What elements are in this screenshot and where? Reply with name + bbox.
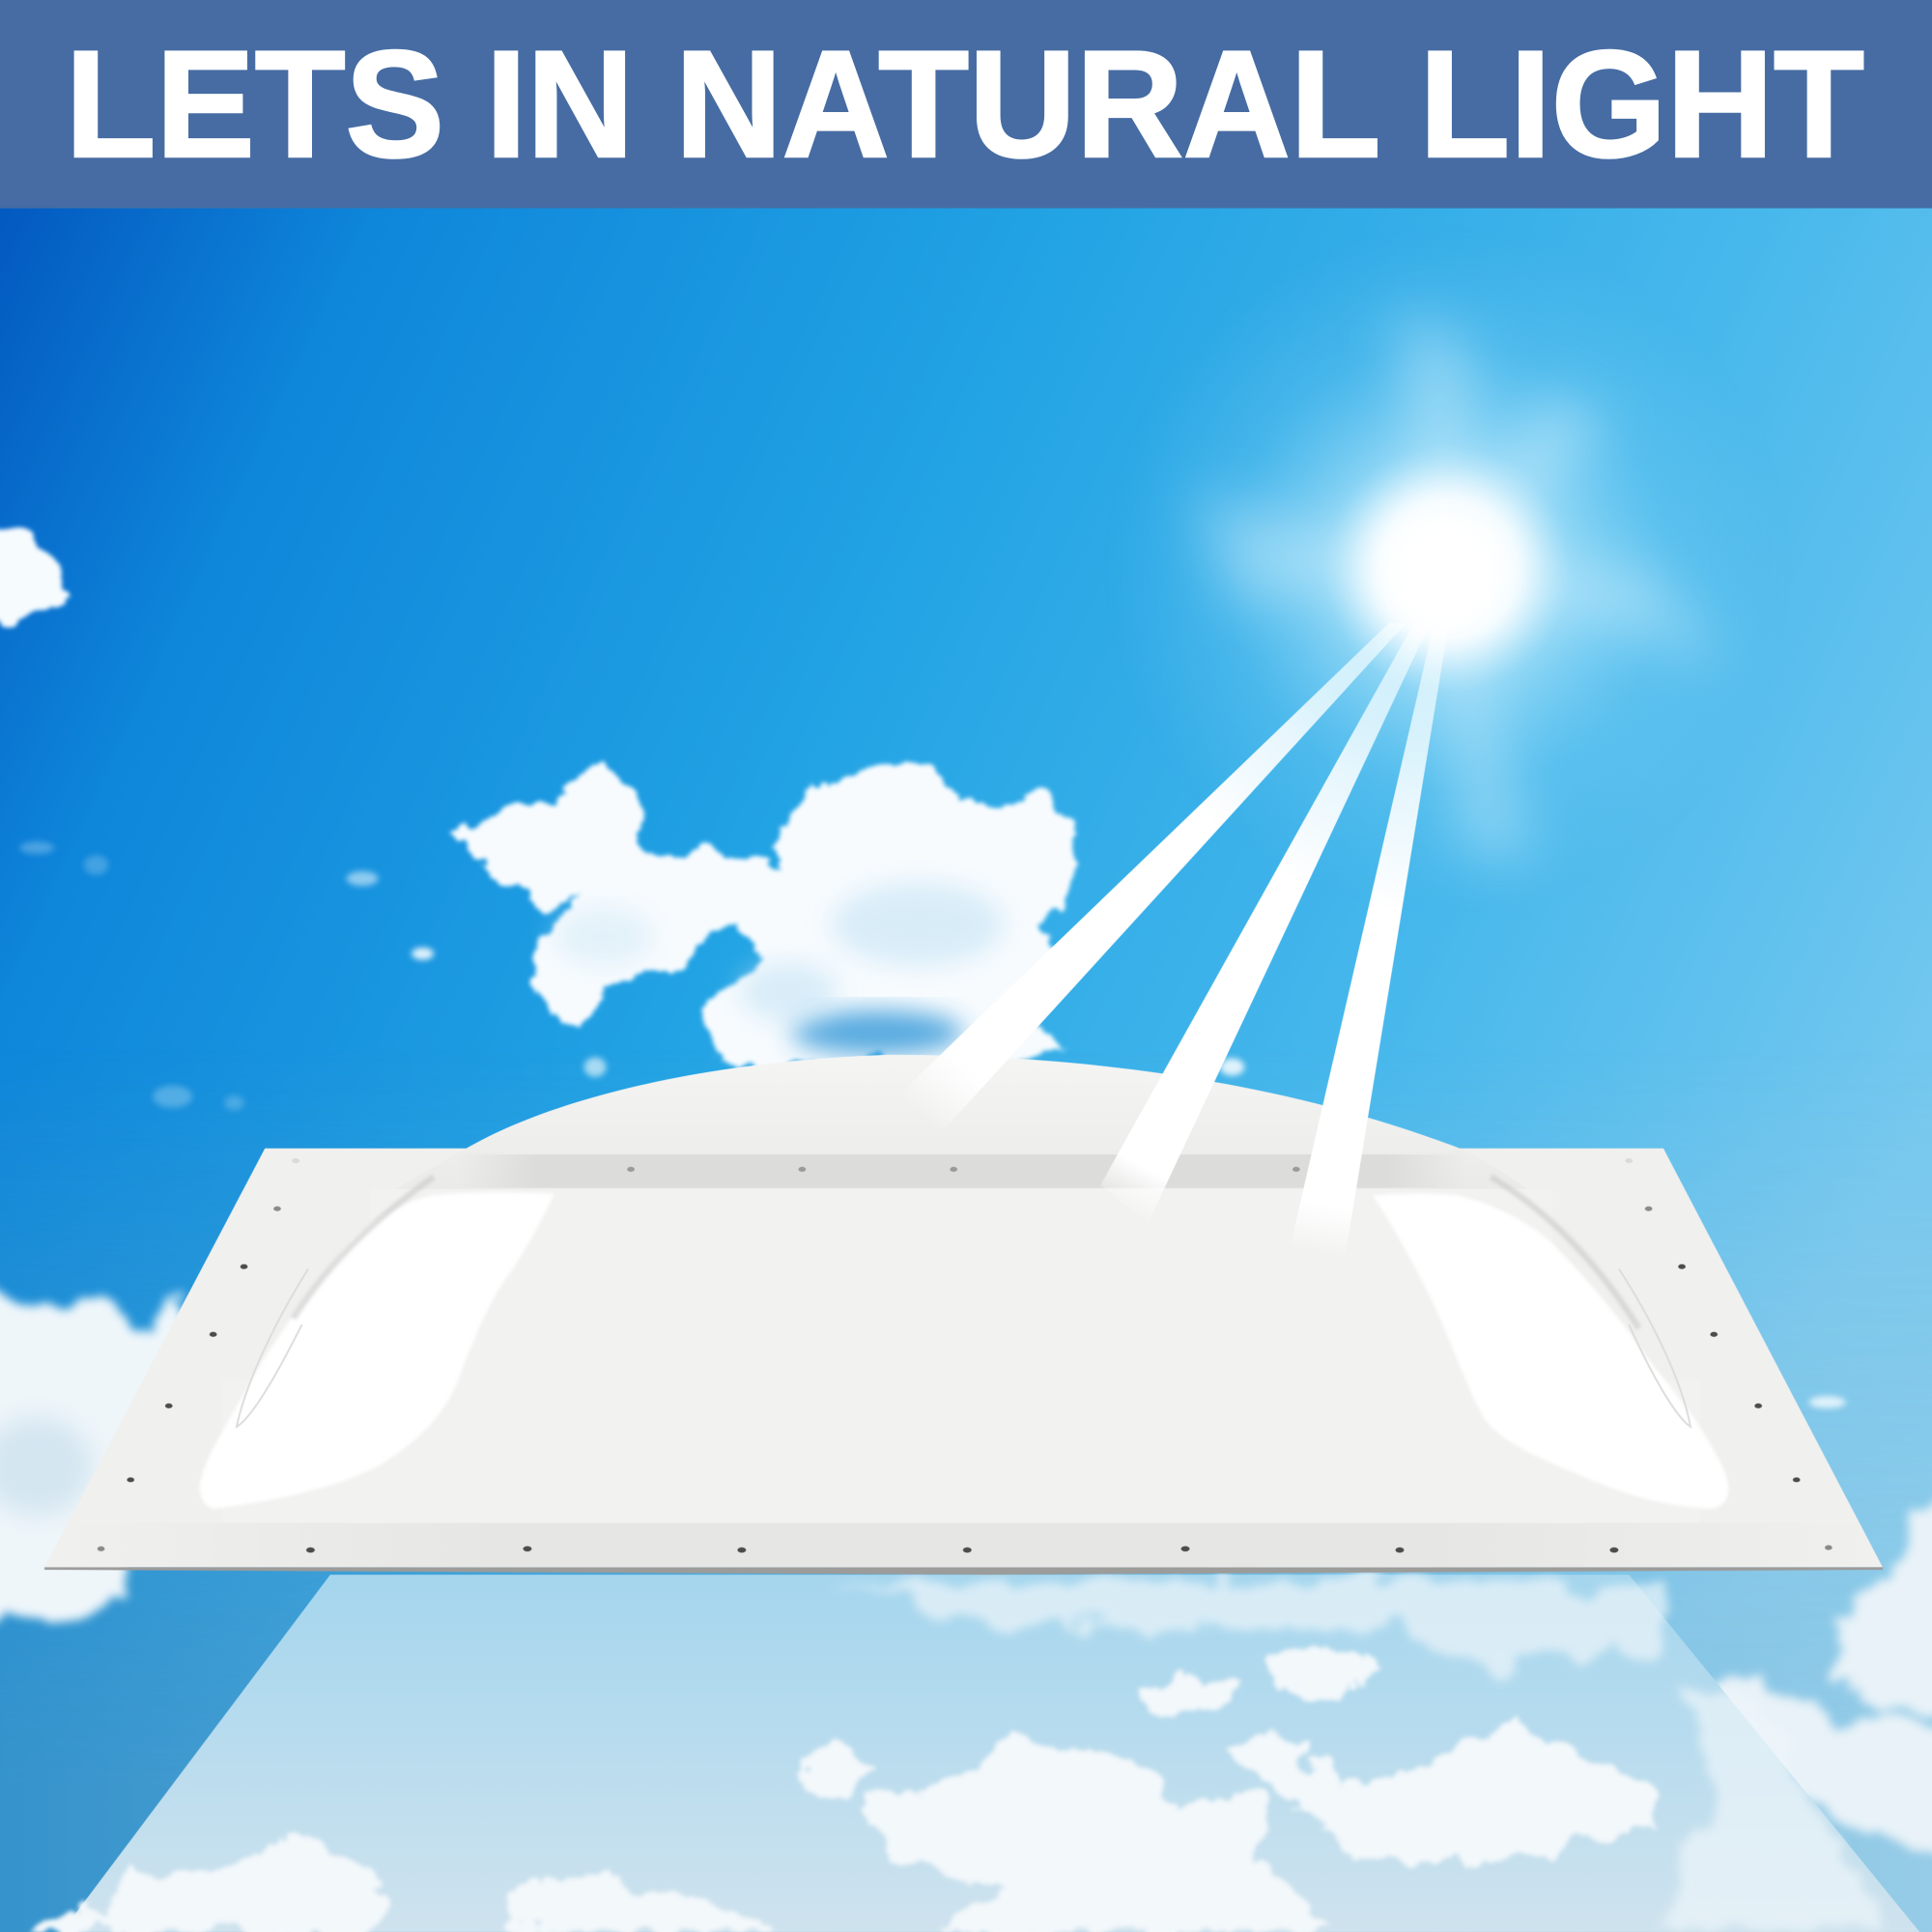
screws: [98, 1158, 1833, 1552]
translucent light beam under skylight: [62, 1575, 1919, 1932]
flange front lip: [74, 1523, 1861, 1567]
sun: [1103, 224, 1793, 914]
sun ray 3: [1290, 622, 1449, 1254]
sun ray 2: [1100, 622, 1430, 1222]
cloud: top-left edge: [0, 524, 74, 622]
flange: [44, 1149, 1883, 1575]
right dome edge shading: [1491, 1177, 1690, 1427]
left dome edge shading: [237, 1177, 434, 1427]
dome top: [397, 1055, 1528, 1189]
dome front face: [370, 1189, 1552, 1523]
sun ray 1: [899, 622, 1405, 1131]
dome lower face: [222, 1380, 1700, 1523]
right highlight: [1373, 1193, 1729, 1509]
cloud: left, behind flange: [0, 1282, 185, 1620]
header banner: [0, 0, 1932, 209]
clouds inside light beam: [25, 1577, 1886, 1932]
clouds: far right edge: [1676, 1497, 1932, 1848]
left highlight: [200, 1192, 554, 1509]
title: LETS IN NATURAL LIGHT: [66, 19, 1864, 189]
rear dome band: [419, 1154, 1503, 1188]
small wisps of cloud: [19, 841, 1846, 1408]
cloud: central cumulus: [446, 760, 1078, 1069]
skylight: [44, 1055, 1883, 1575]
